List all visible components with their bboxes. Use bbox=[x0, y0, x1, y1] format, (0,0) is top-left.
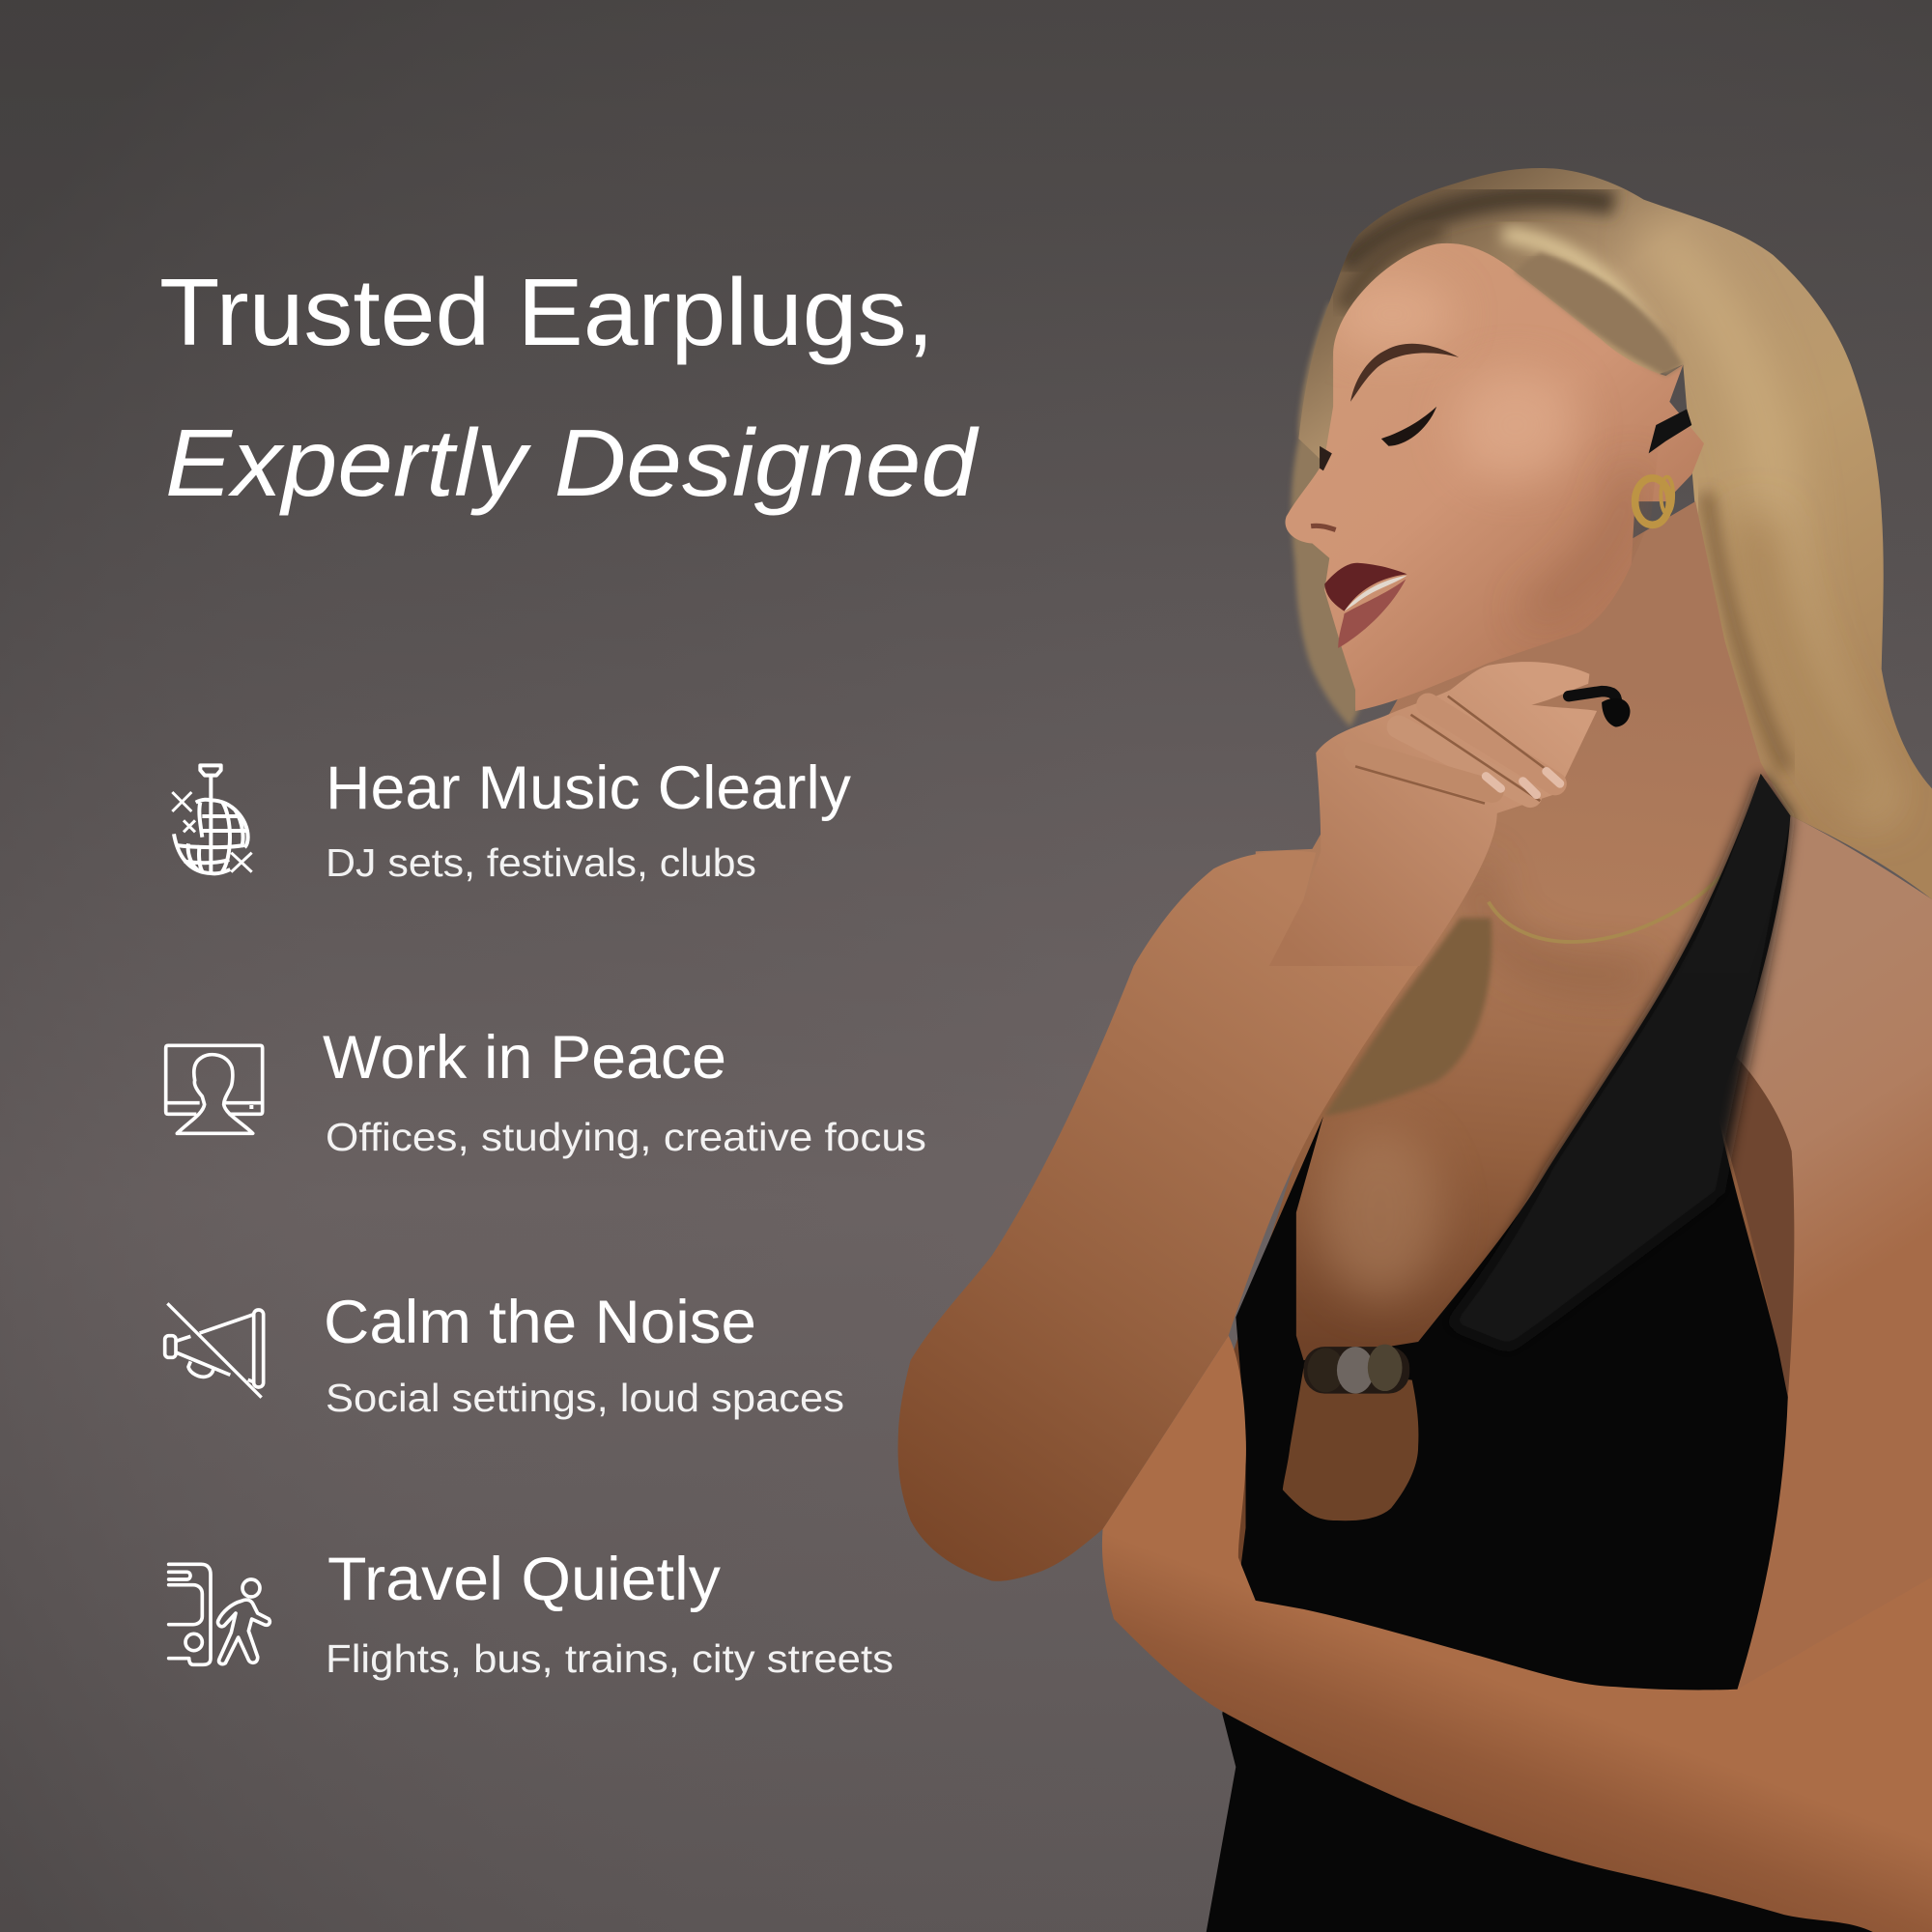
face and profile bbox=[1286, 243, 1704, 711]
feature: calm the noise bbox=[165, 1289, 844, 1420]
hair strands under arm bbox=[1323, 918, 1492, 1117]
dress bead ornament bbox=[1303, 1345, 1409, 1394]
nostril bbox=[1311, 526, 1336, 529]
earplug held in fingers bbox=[1569, 692, 1630, 727]
closed eye bbox=[1381, 407, 1436, 446]
shaded torso strip by arm bbox=[1717, 1047, 1794, 1397]
description: Flights, bus, trains, city streets bbox=[326, 1636, 894, 1681]
raised forearm bbox=[898, 851, 1418, 1581]
feature: hear music bbox=[172, 754, 852, 885]
heading: Work in Peace bbox=[323, 1024, 726, 1092]
dress cutout bbox=[1283, 1368, 1418, 1520]
title line 2: Expertly Designed bbox=[165, 410, 980, 516]
description: DJ sets, festivals, clubs bbox=[326, 840, 756, 885]
description: Social settings, loud spaces bbox=[326, 1376, 844, 1420]
gold earrings bbox=[1635, 477, 1673, 525]
icon: crossed megaphone bbox=[165, 1303, 264, 1398]
heading: Calm the Noise bbox=[324, 1289, 756, 1356]
black dress bbox=[1207, 774, 1873, 1932]
earplug in ear bbox=[1649, 409, 1691, 453]
hair bbox=[1292, 168, 1932, 899]
hair over ear bbox=[1515, 252, 1683, 376]
eyebrow bbox=[1350, 344, 1459, 402]
right shoulder and upper arm bbox=[1725, 815, 1932, 1932]
crossed lower arm and hand bbox=[1102, 1336, 1932, 1932]
feature: work in peace bbox=[166, 1024, 926, 1159]
icon: disco ball bbox=[172, 765, 252, 873]
photo: woman wearing earplug bbox=[898, 168, 1932, 1932]
description: Offices, studying, creative focus bbox=[326, 1115, 926, 1159]
heading: Travel Quietly bbox=[327, 1546, 722, 1613]
icon: bus and walking person bbox=[169, 1564, 270, 1664]
neck, torso and shoulders bbox=[1233, 501, 1932, 1690]
heading: Hear Music Clearly bbox=[326, 754, 852, 822]
icon: monitor with person bbox=[166, 1045, 263, 1133]
lips bbox=[1324, 563, 1407, 611]
hand at chin bbox=[1269, 662, 1597, 966]
title line 1: Trusted Earplugs, bbox=[159, 259, 934, 365]
feature: travel quietly bbox=[169, 1546, 894, 1681]
title bbox=[159, 259, 980, 516]
